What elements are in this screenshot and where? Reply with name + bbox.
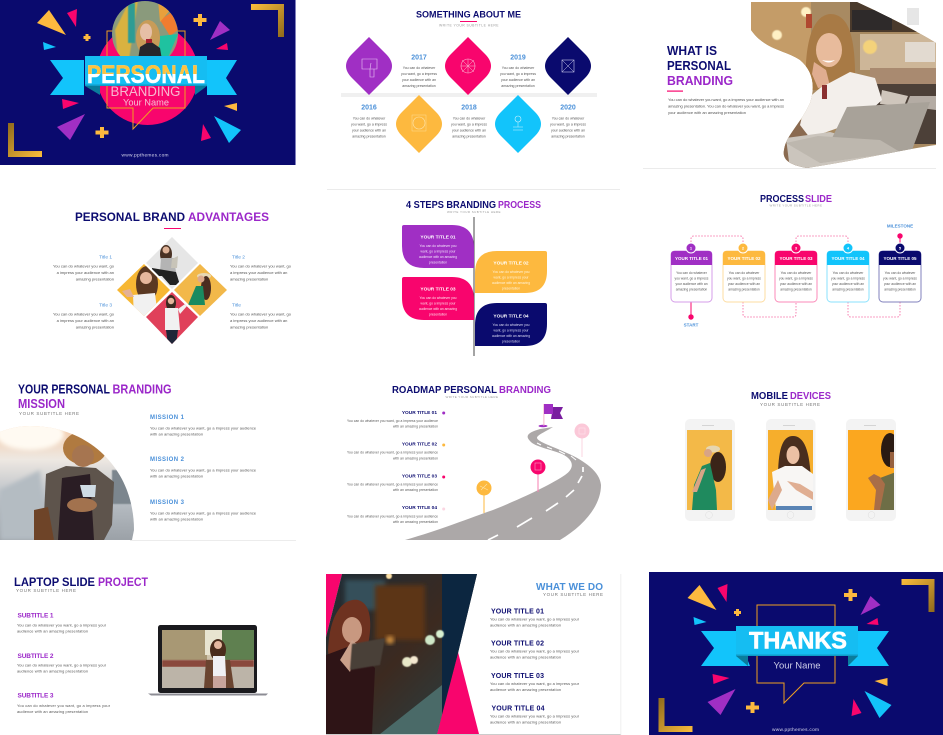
subtitle 3 block (17, 692, 111, 714)
title: YOUR PERSONAL (18, 382, 110, 396)
photo diamond right (174, 264, 227, 316)
portrait photo circle (112, 1, 178, 56)
item 2: audience with an amazing presentation (490, 654, 561, 660)
step 2 leaf: presentation (502, 286, 520, 290)
card 2: You can do whatever (729, 271, 760, 275)
text 2019: you want, go a impress (500, 72, 536, 76)
subtitle 2 block: SUBTITLE 2 (18, 653, 54, 660)
text: Title 1: You can do whatever you want, go (53, 264, 115, 268)
title (751, 391, 831, 402)
mission 2 (150, 457, 256, 478)
confetti shapes and gold corners (658, 579, 934, 732)
phone 1 (685, 419, 735, 521)
card 5: 5 (899, 246, 902, 250)
confetti shapes and gold corners (8, 4, 284, 157)
step 1 leaf (402, 225, 474, 268)
card 4: your audience with an (832, 282, 864, 286)
card 2: your audience with an (728, 282, 760, 286)
subtitle: WRITE YOUR SUBTITLE HERE (446, 395, 498, 399)
text 2020: you want, go a impress (550, 122, 586, 126)
text 2019: You can do whatever (502, 66, 535, 70)
title: BRANDING (112, 382, 172, 396)
title: ROADMAP PERSONAL (392, 384, 498, 396)
text 2020: You can do whatever (552, 116, 585, 120)
text 2016 (351, 116, 387, 138)
text 2016: your audience with an (352, 128, 386, 132)
slide: roadmap personal branding (347, 384, 601, 540)
text: Title: amazing presentation (230, 324, 268, 330)
subtitle 1 block: You can do whatever you want, go a impress your (17, 622, 107, 628)
text: Title 1 (53, 254, 115, 282)
mission 2: MISSION 2 (150, 457, 185, 463)
diamond 2020 navy (545, 37, 591, 95)
subtitle 1 block: SUBTITLE 1 (18, 612, 54, 620)
card 4 (827, 242, 869, 302)
step 1 leaf: YOUR TITLE 01 (420, 234, 456, 240)
diamond 2017 yellow (396, 95, 442, 153)
year 2019: 2019 (510, 54, 526, 62)
title: THANKS: THANKS (749, 628, 847, 654)
blue ribbon (701, 626, 889, 666)
text 2017: your audience with an (402, 78, 436, 82)
year 2018: 2018 (461, 104, 477, 112)
body text (668, 97, 784, 115)
milestone marker (887, 224, 913, 246)
slide: personal branding mission (0, 382, 296, 542)
card 2: 2 (742, 246, 745, 250)
title: DEVICES (790, 391, 831, 402)
item 2: You can do whatever you want, go a impress your (490, 648, 580, 654)
item 4: YOUR TITLE 04 (492, 706, 545, 712)
item 3: audience with an amazing presentation (490, 687, 561, 692)
slide: personal branding cover (0, 0, 296, 165)
text 2019: amazing presentation (501, 84, 535, 88)
title: WHAT IS (667, 43, 717, 58)
milestone marker: MILESTONE (887, 224, 913, 228)
text 2020 (550, 116, 586, 138)
phone 3 (846, 419, 899, 521)
mission 3: You can do whatever you want, go a impress your audience (150, 510, 256, 516)
body text: amazing presentation. You can do whatever you want, go a impress (668, 104, 784, 108)
card 5: YOUR TITLE 05 (884, 256, 917, 261)
road item 3: YOUR TITLE 03 (402, 474, 437, 480)
step 3 leaf: YOUR TITLE 03 (420, 286, 456, 292)
year 2017: 2017 (411, 54, 427, 62)
text 2016: amazing presentation (352, 134, 386, 138)
card 3: you want, go a impress (779, 276, 813, 280)
title accent (164, 228, 181, 229)
item 1: audience with an amazing presentation (490, 622, 561, 628)
card 1: you want, go a impress (675, 276, 709, 280)
item 1: You can do whatever you want, go a impress your (490, 616, 580, 622)
text 2019 (500, 66, 536, 88)
slide: 4 steps branding process (327, 189, 620, 356)
laptop with photo (148, 625, 268, 696)
slide: personal brand advantages (53, 210, 292, 346)
body text: You can do whatever you want, go a impress your audience with an (668, 97, 784, 102)
pin: light pink (574, 424, 590, 457)
night window photo (326, 573, 482, 734)
card 3: 3 (795, 246, 798, 250)
grey placeholder square (907, 8, 919, 25)
card 5: you want, go a impress (883, 276, 917, 280)
title (75, 210, 269, 224)
step 4 leaf: YOUR TITLE 04 (493, 314, 529, 320)
diamond 2019 blue (495, 95, 541, 153)
step 4 leaf: You can do whatever you (493, 323, 530, 327)
mission 2: You can do whatever you want, go a impress your audience (150, 468, 256, 472)
road item 2: YOUR TITLE 02 (402, 442, 437, 448)
subtitle: WRITE YOUR SUBTITLE HERE (447, 210, 501, 214)
subtitle 1 block: audience with an amazing presentation (17, 628, 88, 634)
card 5: your audience with an (884, 282, 916, 286)
road item 2: You can do whatever you want, go a impress your audience (347, 450, 438, 454)
title: PERSONAL (667, 58, 731, 73)
card 4: 4 (847, 246, 850, 250)
step 3 leaf: You can do whatever you (420, 296, 457, 300)
card 4: YOUR TITLE 04 (832, 256, 865, 261)
text 2020: your audience with an (551, 128, 585, 132)
text: Title 3: Title 3 (99, 302, 112, 308)
card 2: you want, go a impress (727, 276, 761, 280)
card 3: YOUR TITLE 03 (780, 256, 813, 261)
text: Title 2: a impress your audience with an (230, 270, 287, 275)
title: PERSONAL: PERSONAL (87, 61, 205, 89)
card 4: you want, go a impress (831, 276, 865, 280)
item 3: You can do whatever you want, go a impress your (490, 681, 580, 686)
year 2020: 2020 (560, 104, 576, 112)
subtitle 3 block: You can do whatever you want, go a impress your (17, 703, 111, 708)
road (405, 427, 601, 540)
text: Title 3: You can do whatever you want, go (53, 312, 115, 316)
item 3: YOUR TITLE 03 (491, 673, 544, 680)
card 3: You can do whatever (781, 271, 812, 275)
title (667, 43, 733, 88)
text: Title 2: Title 2 (232, 254, 245, 260)
subtitle 2 block: audience with an amazing presentation (17, 668, 88, 674)
title: SOMETHING ABOUT ME (416, 10, 521, 20)
road item 3: You can do whatever you want, go a impress your audience (347, 482, 438, 486)
text 2018 (451, 116, 487, 138)
step 1 leaf: presentation (429, 260, 447, 264)
item 4: You can do whatever you want, go a impress your (490, 714, 580, 718)
pink triangle top (326, 574, 342, 637)
title: 4 STEPS BRANDING (406, 199, 496, 211)
item 3 (490, 673, 580, 692)
step 1 leaf: want, go a impress your (420, 250, 456, 254)
text: Title 3: amazing presentation (76, 324, 114, 330)
subtitle: BRANDING: BRANDING (110, 84, 180, 99)
photo: woman with phone (0, 418, 136, 542)
card 2: YOUR TITLE 02 (728, 256, 761, 261)
title: PERSONAL BRAND (75, 210, 185, 224)
slide: mobile devices (685, 391, 899, 521)
title: BRANDING (667, 73, 733, 88)
Your Name: Your Name (774, 660, 820, 670)
mission 1 (150, 415, 256, 436)
card 1: 1 (690, 246, 693, 250)
road item 2 (347, 442, 445, 460)
title: MOBILE (751, 391, 788, 402)
text 2018: you want, go a impress (451, 122, 487, 126)
text 2017: you want, go a impress (401, 72, 437, 76)
title (760, 194, 832, 205)
photo diamond top (146, 237, 198, 289)
slide: process slide (671, 194, 921, 328)
card 5: amazing presentation (884, 288, 916, 292)
title: SLIDE (805, 194, 832, 205)
title: PERSONAL (88, 65, 205, 84)
title: PERSONAL: PERSONAL (87, 61, 205, 89)
road item 1: YOUR TITLE 01 (402, 410, 437, 416)
step 2 leaf: YOUR TITLE 02 (493, 260, 529, 266)
road item 2: with an amazing presentation (393, 456, 438, 460)
slide: laptop slide project (14, 577, 268, 714)
card 1: You can do whatever (676, 271, 708, 275)
title: PROCESS (498, 199, 541, 211)
text: Title: a impress your audience with an (230, 318, 287, 323)
pink circle (96, 23, 198, 125)
card 1: amazing presentation (676, 288, 707, 292)
text: Title 1: Title 1 (99, 254, 112, 260)
slide: something about me timeline (341, 10, 597, 153)
subtitle 3 block: SUBTITLE 3 (18, 692, 54, 700)
subtitle: WRITE YOUR SUBTITLE HERE (439, 24, 499, 28)
text: Title 3 (53, 302, 115, 330)
text 2018: your audience with an (452, 128, 486, 132)
card 5: You can do whatever (885, 271, 916, 275)
photo blob: woman with laptop (751, 2, 940, 170)
step 2 leaf: audience with an amazing (492, 281, 530, 285)
title accent (460, 21, 477, 22)
subtitle: YOUR SUBTITLE HERE (543, 592, 603, 597)
text: Title 2: amazing presentation (230, 276, 268, 282)
title: MISSION (18, 397, 65, 411)
subtitle: WRITE YOUR SUBTITLE HERE (770, 204, 822, 208)
title (14, 577, 148, 589)
diamond 2018 pink (445, 37, 491, 95)
road item 1 (347, 410, 445, 428)
dotted connectors (691, 236, 900, 317)
text 2019: your audience with an (501, 78, 535, 82)
slide: what is personal branding (643, 2, 940, 170)
item 2: YOUR TITLE 02 (491, 640, 544, 648)
mission 2: with an amazing presentation (150, 474, 203, 478)
road item 4: You can do whatever you want, go a impress your audience (347, 514, 438, 518)
subtitle: Your Name: Your Name (123, 98, 169, 108)
text 2018: amazing presentation (452, 134, 486, 138)
text 2017 (401, 66, 437, 88)
title: LAPTOP SLIDE (14, 577, 95, 589)
item 4: audience with an amazing presentation (490, 720, 561, 724)
card 2: amazing presentation (728, 288, 760, 292)
text 2017: You can do whatever (403, 66, 436, 70)
step 1 leaf: audience with an amazing (419, 255, 457, 259)
item 4 (490, 706, 580, 724)
website: www.ppthemes.com (772, 727, 819, 733)
item 1: YOUR TITLE 01 (491, 608, 544, 616)
text: Title: Title (232, 302, 241, 308)
subtitle: YOUR SUBTITLE HERE (16, 588, 76, 593)
pin: pink (530, 460, 546, 492)
card 1: YOUR TITLE 01 (675, 256, 708, 261)
mission 3 (150, 500, 256, 522)
website: www.ppthemes.com (122, 152, 168, 158)
card 2 (723, 242, 765, 302)
step 2 leaf: want, go a impress your (494, 276, 529, 280)
text: Title 1: amazing presentation (76, 276, 114, 282)
road item 1: You can do whatever you want, go a impress your audience (347, 419, 438, 423)
road item 3 (347, 474, 445, 492)
text 2020: amazing presentation (551, 134, 585, 138)
stem line (474, 217, 475, 356)
text: Title 2 (230, 254, 292, 282)
step 1 leaf: You can do whatever you (420, 244, 457, 248)
text: Title 1: a impress your audience with an (57, 270, 114, 275)
card 4: amazing presentation (832, 288, 864, 292)
text 2016: you want, go a impress (351, 122, 387, 126)
subtitle 2 block (17, 653, 107, 674)
step 4 leaf: audience with an amazing (492, 334, 530, 338)
step 3 leaf: presentation (429, 312, 447, 316)
card 3: amazing presentation (780, 288, 812, 292)
item 1 (490, 608, 580, 628)
card 3 (775, 242, 817, 302)
diamond 2016 purple (346, 37, 392, 95)
subtitle 1 block (17, 612, 107, 634)
slide: what we do (326, 573, 621, 735)
step 4 leaf: want, go a impress your (494, 328, 529, 332)
blue ribbon (50, 56, 237, 95)
subtitle: YOUR SUBTITLE HERE (19, 411, 79, 416)
road item 3: with an amazing presentation (393, 488, 438, 492)
mission 3: with an amazing presentation (150, 516, 203, 522)
text: Title 2: You can do whatever you want, go (230, 264, 292, 268)
text 2017: amazing presentation (402, 84, 436, 88)
mission 1: You can do whatever you want, go a impress your audience (150, 426, 256, 430)
mission 3: MISSION 3 (150, 500, 185, 506)
mission 1: MISSION 1 (150, 415, 185, 421)
title (18, 382, 172, 411)
title: PROCESS (760, 194, 804, 205)
card 3: your audience with an (780, 282, 812, 286)
step 2 leaf: You can do whatever you (493, 270, 530, 274)
road item 1: with an amazing presentation (393, 424, 438, 428)
subtitle 2 block: You can do whatever you want, go a impress your (17, 662, 107, 668)
year 2016: 2016 (361, 104, 377, 112)
card 4: You can do whatever (833, 271, 864, 275)
text: Title (230, 302, 292, 330)
road item 4 (347, 505, 445, 524)
text 2018: You can do whatever (453, 116, 486, 120)
title: ADVANTAGES (188, 210, 269, 224)
subtitle: YOUR SUBTITLE HERE (760, 402, 820, 407)
pin: yellow (476, 480, 492, 513)
card 5 (879, 242, 921, 302)
text: Title: You can do whatever you want, go (230, 312, 292, 316)
step 3 leaf: want, go a impress your (420, 302, 456, 306)
slide: thanks closing (649, 572, 943, 735)
card 1 (671, 242, 712, 302)
step 4 leaf (475, 303, 547, 346)
title: PROJECT (98, 577, 148, 589)
step 3 leaf (402, 277, 474, 320)
card 1: your audience with an (675, 282, 708, 286)
title: BRANDING (499, 384, 551, 396)
item 2 (490, 640, 580, 660)
road item 4: YOUR TITLE 04 (402, 505, 437, 511)
road item 4: with an amazing presentation (393, 520, 438, 524)
pink triangle bottom (437, 652, 479, 734)
step 4 leaf: presentation (502, 340, 520, 344)
subtitle 3 block: audience with an amazing presentation (17, 709, 88, 714)
photo diamond left (117, 264, 170, 316)
speech bubble outline (757, 605, 835, 703)
body text: your audience with an amazing presentation (668, 110, 746, 115)
step 2 leaf (475, 251, 547, 293)
phone 2 (766, 419, 816, 521)
speech bubble outline (107, 31, 185, 129)
title: WHAT WE DO (536, 582, 603, 593)
photo diamond bottom (146, 292, 198, 344)
text 2016: You can do whatever (353, 116, 386, 120)
text: Title 3: a impress your audience with an (57, 318, 114, 323)
flag (538, 404, 563, 427)
title accent (667, 90, 683, 92)
start marker: START (684, 322, 699, 328)
start marker (684, 302, 699, 328)
step 3 leaf: audience with an amazing (419, 307, 457, 311)
mission 1: with an amazing presentation (150, 432, 203, 436)
